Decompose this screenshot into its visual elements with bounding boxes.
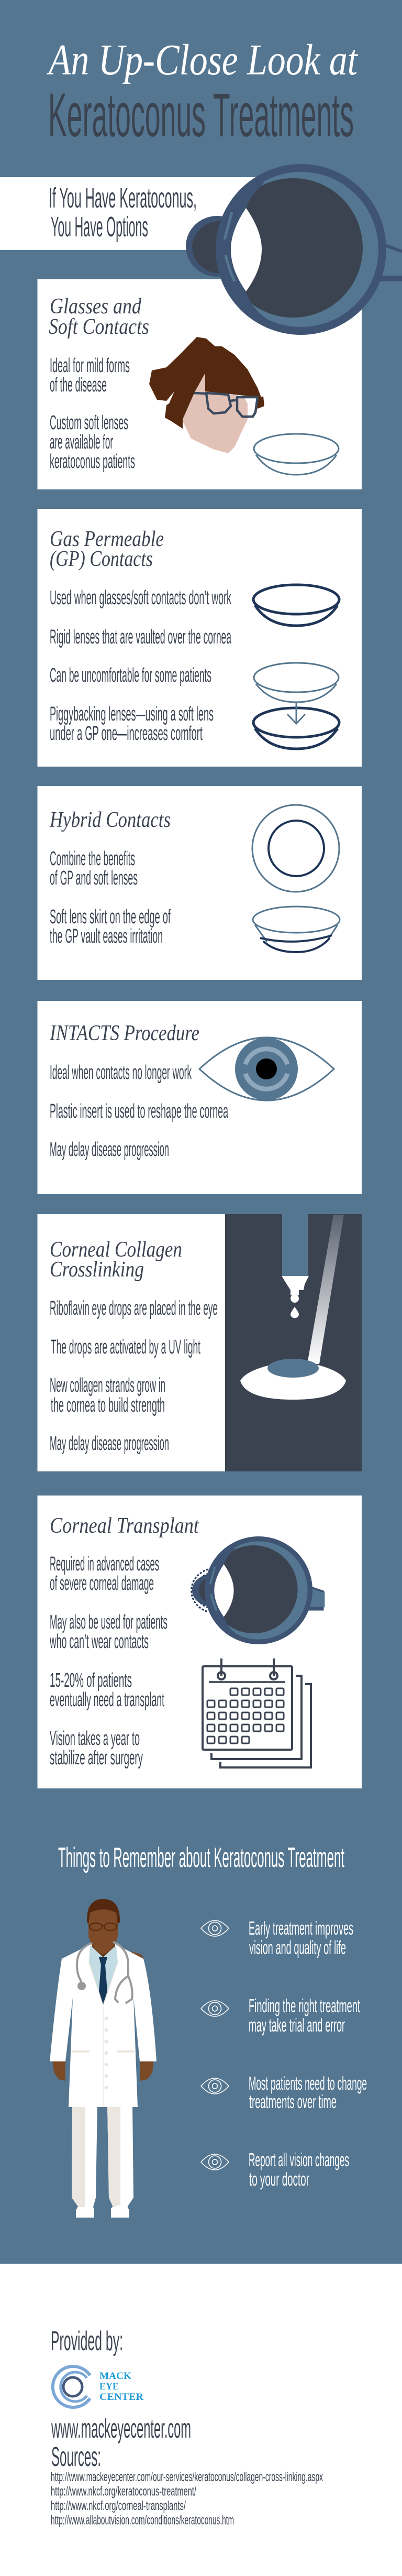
text: glasses facts: Custom soft lenses: [50, 412, 128, 434]
hands: [52, 2059, 154, 2081]
intro band: [0, 177, 256, 250]
icon: woman with glasses: [149, 337, 264, 453]
panel: corneal transplant: May also be used for patients: [50, 1611, 168, 1633]
heading: transplant: Corneal Transplant: [50, 1514, 199, 1538]
heading: glasses: [49, 294, 149, 339]
heading: gas permeable: [50, 527, 164, 571]
text: item 3: [249, 2072, 367, 2112]
logo: Mack Eye Center: CENTER: [99, 2392, 143, 2403]
text: crosslinking facts: May delay disease progression: [50, 1433, 169, 1455]
text: glasses facts: Ideal for mild forms: [50, 355, 130, 377]
text: crosslinking facts: the cornea to build strength: [51, 1394, 165, 1416]
head: [87, 1899, 120, 1955]
doctor glasses: [88, 1923, 118, 1930]
heading: crosslinking: Corneal Collagen: [50, 1238, 182, 1262]
text: crosslinking facts: New collagen strands grow in: [50, 1374, 165, 1396]
title: [47, 36, 359, 150]
intro band: If You Have Keratoconus,: [49, 182, 197, 214]
logo: Mack Eye Center: MACK: [99, 2371, 131, 2382]
shoes: [76, 2203, 129, 2218]
text: glasses facts: of the disease: [50, 374, 107, 396]
heading: INTACTS: INTACTS Procedure: [49, 1021, 199, 1045]
optic nerve: [366, 244, 402, 281]
panel: corneal collagen crosslinking: [38, 1214, 362, 1471]
panel: hybrid contacts: Soft lens skirt on the edge of: [50, 906, 171, 928]
icon: eye 1: [201, 1920, 229, 1936]
footer: sources: [51, 2442, 323, 2528]
icon: large eye cross-section: [186, 164, 402, 335]
icon: eye 2: [201, 2001, 229, 2016]
text: transplant facts: of severe corneal damage: [50, 1573, 154, 1595]
text: item 4: [249, 2149, 349, 2190]
text: hybrid facts: Combine the benefits: [50, 848, 135, 870]
footer: sources: http://www.allaboutvision.com/conditions/keratoconus.htm: [51, 2513, 234, 2528]
panel: corneal transplant: [38, 1496, 362, 1788]
text: item 4: to your doctor: [249, 2168, 309, 2190]
arrow: piggyback: [287, 702, 305, 724]
icon: soft lens: [254, 434, 339, 475]
text: crosslinking facts: The drops are activated by a UV light: [51, 1336, 200, 1358]
icon: hybrid lens side view: [253, 907, 340, 952]
text: INTACTS facts: [50, 1062, 228, 1161]
footer: sources: http://www.nkcf.org/corneal-transplants/: [51, 2498, 186, 2513]
text: transplant facts: who can’t wear contacts: [50, 1631, 149, 1653]
text: hybrid facts: [50, 848, 171, 947]
text: crosslinking facts: [50, 1297, 218, 1455]
icon: calendar: [203, 1658, 311, 1767]
text: transplant facts: stabilize after surgery: [50, 1747, 143, 1769]
text: transplant facts: Vision takes a year to: [50, 1728, 140, 1750]
illustration: doctor: [50, 1899, 157, 2218]
lens: [231, 208, 262, 291]
heading: glasses: Glasses and: [50, 294, 142, 319]
intro band: You Have Options: [51, 211, 148, 243]
text: transplant facts: [50, 1553, 168, 1769]
heading: crosslinking: [50, 1238, 182, 1282]
icon: eye 3: [201, 2078, 229, 2094]
heading: gas permeable: (GP) Contacts: [50, 547, 153, 571]
panel: hybrid contacts: [38, 786, 362, 980]
text: GP facts: Can be uncomfortable for some patients: [50, 664, 211, 686]
text: GP facts: [50, 587, 231, 745]
text: item 2: [249, 1995, 360, 2036]
icon: UV light beam: [307, 1215, 344, 1364]
heading: glasses: Soft Contacts: [49, 315, 149, 339]
panel: glasses and soft contacts: keratoconus patients: [50, 451, 135, 473]
text: item 1: [249, 1917, 353, 1958]
icon: GP lens below: [253, 708, 339, 749]
shirt: [89, 1945, 118, 2005]
footer: sources: Sources:: [51, 2442, 101, 2472]
panel: hybrid contacts: the GP vault eases irritation: [50, 925, 163, 947]
text: glasses facts: are available for: [50, 431, 113, 453]
icon: eye dropper: [282, 1214, 309, 1318]
icon: eye cross-section with dashed cornea: [192, 1536, 325, 1645]
panel: gas permeable contacts: [38, 509, 362, 767]
logo: Mack Eye Center: EYE: [99, 2381, 119, 2392]
text: GP facts: under a GP one—increases comfort: [50, 723, 203, 745]
icon: soft lens above: [254, 663, 339, 702]
trousers: [72, 2104, 133, 2207]
panel: glasses and soft contacts: [38, 279, 362, 489]
text: hybrid facts: of GP and soft lenses: [50, 867, 138, 889]
panel: corneal transplant: eventually need a transplant: [50, 1689, 164, 1711]
footer: sources: http://www.nkcf.org/keratoconus-treatment/: [51, 2484, 196, 2498]
icon: GP lens: [253, 585, 339, 626]
lab coat: [50, 1944, 157, 2107]
text: www.mackeyecenter.com: [51, 2414, 191, 2444]
panel: corneal transplant: Required in advanced cases: [50, 1553, 159, 1575]
tie: [99, 1957, 107, 2005]
list: things to remember: [201, 1917, 367, 2190]
heading: crosslinking: Crosslinking: [50, 1258, 144, 1282]
cornea: [186, 216, 250, 277]
text: INTACTS facts: Ideal when contacts no longer work: [50, 1062, 192, 1084]
panel: INTACTS procedure: [38, 1001, 362, 1194]
heading: gas permeable: Gas Permeable: [50, 527, 164, 551]
neck: [92, 1939, 115, 1962]
text: transplant facts: 15-20% of patients: [50, 1669, 132, 1691]
text: GP facts: Piggybacking lenses—using a soft lens: [50, 703, 214, 725]
icon: eye 4: [201, 2154, 229, 2170]
text: INTACTS facts: May delay disease progression: [50, 1139, 169, 1161]
icon: eye with inserts: [199, 1038, 334, 1100]
coat details: [72, 1962, 135, 2107]
text: glasses facts: [50, 355, 135, 473]
stethoscope: [77, 1942, 132, 2003]
logo: Mack Eye Center: [53, 2366, 143, 2407]
icon: eye receiving drops: [240, 1359, 346, 1400]
icon: hybrid lens top view: [252, 805, 339, 892]
shoulder detail: [131, 1951, 144, 1959]
heading: hybrid: Hybrid Contacts: [49, 808, 171, 832]
text: Provided by:: [51, 2326, 123, 2356]
